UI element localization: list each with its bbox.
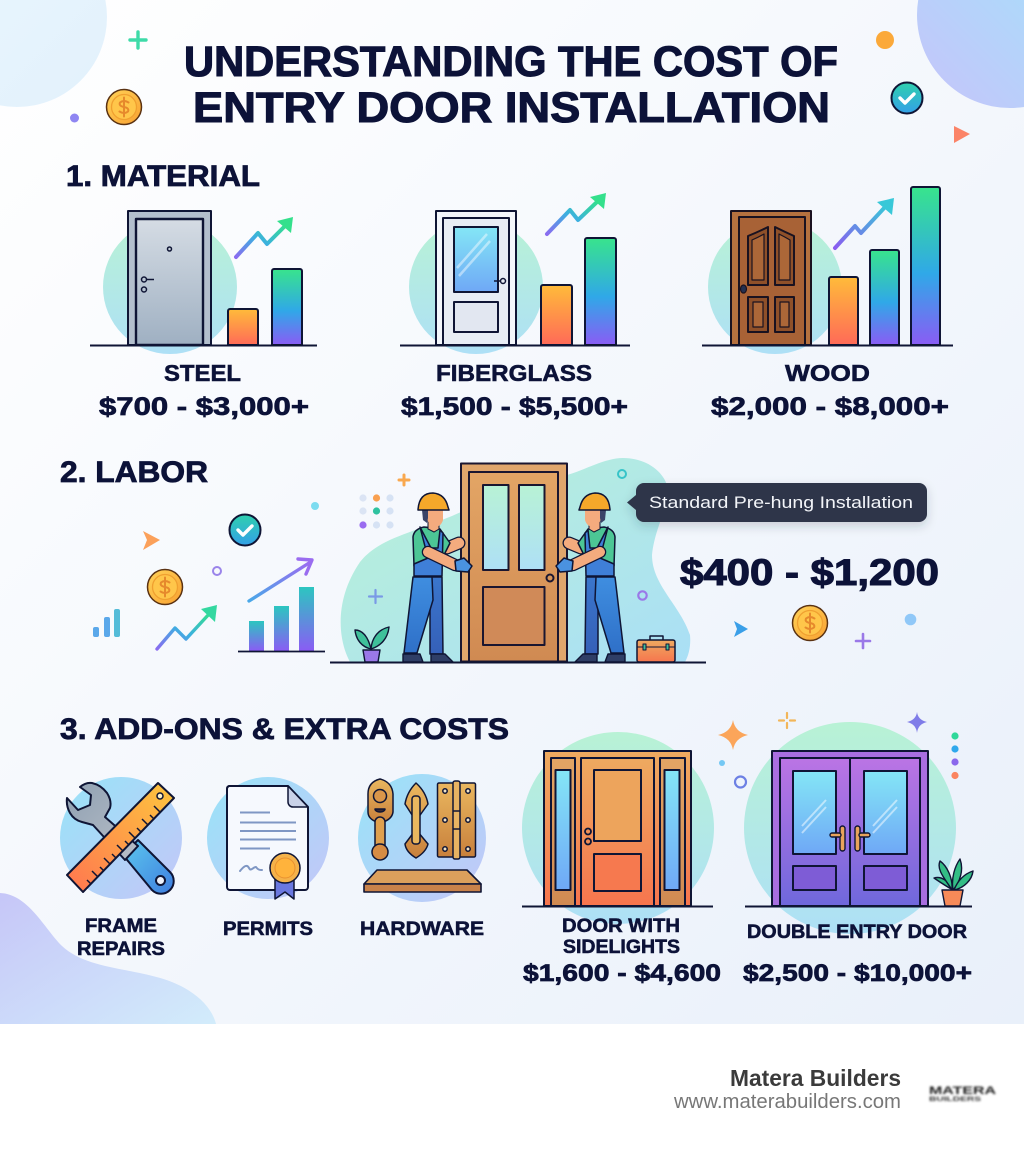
icon: growth arrow bbox=[236, 217, 293, 257]
icon: potted plant bbox=[934, 859, 973, 906]
icon: growth arrow bbox=[835, 198, 894, 248]
label: frame repairs: REPAIRS bbox=[77, 939, 165, 960]
price: wood: $2,000 - $8,000+ bbox=[711, 393, 949, 421]
icon: zigzag arrow bbox=[157, 605, 217, 649]
panel: permits bbox=[207, 777, 329, 940]
icon: fiberglass door bbox=[436, 211, 516, 345]
heading: add-ons: 3. ADD-ONS & EXTRA COSTS bbox=[60, 713, 509, 746]
icon: threshold board bbox=[364, 870, 481, 892]
label: hardware: HARDWARE bbox=[360, 919, 484, 940]
title: UNDERSTANDING THE COST OF bbox=[184, 38, 838, 86]
label: door with sidelights bbox=[562, 916, 680, 958]
heading: labor: 2. LABOR bbox=[60, 456, 208, 489]
icon: steel door bbox=[128, 211, 211, 345]
price: fiberglass: $1,500 - $5,500+ bbox=[401, 393, 628, 421]
icon: door handle plate bbox=[368, 779, 393, 860]
panel: door with sidelights bbox=[522, 732, 721, 987]
icon: growth arrow bbox=[547, 193, 606, 234]
footer brand text: www.materabuilders.com bbox=[673, 1091, 901, 1113]
panel: steel door bbox=[90, 211, 317, 421]
icon: double door bbox=[772, 751, 928, 906]
label: permits: PERMITS bbox=[223, 919, 313, 940]
label: frame repairs bbox=[77, 916, 165, 960]
price: steel: $700 - $3,000+ bbox=[99, 393, 309, 421]
panel: double entry door bbox=[743, 722, 973, 987]
labor illustration bbox=[330, 458, 706, 662]
icon: purple rising arrow bbox=[249, 559, 312, 601]
label: double entry door: DOUBLE ENTRY DOOR bbox=[747, 922, 967, 943]
footer logo: MATERA bbox=[929, 1085, 996, 1097]
icon: wrench bbox=[67, 783, 174, 894]
icon: hinge bbox=[438, 781, 476, 859]
panel: hardware bbox=[358, 774, 486, 940]
bar chart: wood price bbox=[829, 187, 940, 345]
footer logo bbox=[929, 1085, 996, 1103]
label: frame repairs: FRAME bbox=[85, 916, 157, 937]
footer brand text: Matera Builders bbox=[730, 1065, 901, 1091]
title: ENTRY DOOR INSTALLATION bbox=[193, 84, 830, 132]
labor right decorations bbox=[734, 606, 916, 648]
price: door with sidelights: $1,600 - $4,600 bbox=[523, 960, 721, 987]
icon: wooden door bbox=[461, 464, 567, 662]
footer logo: BUILDERS bbox=[929, 1096, 982, 1103]
price: labor: $400 - $1,200 bbox=[680, 552, 939, 593]
header decorations bbox=[70, 31, 970, 143]
callout: standard pre-hung installation: Standard Pre-hung Installation bbox=[649, 493, 913, 512]
panel: wood door bbox=[702, 187, 953, 421]
title bbox=[184, 38, 838, 132]
icon: ruler bbox=[67, 783, 174, 892]
icon: mini bars bbox=[93, 609, 120, 637]
icon: worker left bbox=[403, 493, 472, 662]
icon: pull handle bbox=[405, 783, 428, 858]
heading: material: 1. MATERIAL bbox=[66, 160, 260, 193]
icon: wood door bbox=[731, 211, 811, 345]
labor left decorations bbox=[93, 502, 325, 652]
icon: potted plant bbox=[355, 627, 389, 662]
panel: fiberglass door bbox=[400, 193, 630, 421]
icon: worker right bbox=[556, 493, 625, 662]
callout: standard pre-hung installation bbox=[627, 483, 927, 522]
icon: toolbox bbox=[637, 636, 675, 662]
label: wood: WOOD bbox=[785, 360, 870, 386]
panel: frame repairs bbox=[60, 777, 182, 960]
label: door with sidelights: SIDELIGHTS bbox=[563, 937, 680, 958]
decorative dot grid bbox=[359, 494, 394, 529]
add-on decorations bbox=[718, 712, 959, 788]
label: fiberglass: FIBERGLASS bbox=[436, 360, 592, 386]
price: double entry door: $2,500 - $10,000+ bbox=[743, 960, 972, 987]
footer brand text bbox=[673, 1065, 901, 1113]
icon: door with sidelights bbox=[544, 751, 691, 906]
icon: permit document bbox=[227, 786, 308, 899]
label: steel: STEEL bbox=[164, 360, 241, 386]
bar chart: labor bbox=[238, 587, 325, 652]
bar chart: fiberglass price bbox=[541, 238, 616, 345]
label: door with sidelights: DOOR WITH bbox=[562, 916, 680, 937]
bar chart: steel price bbox=[228, 269, 302, 345]
